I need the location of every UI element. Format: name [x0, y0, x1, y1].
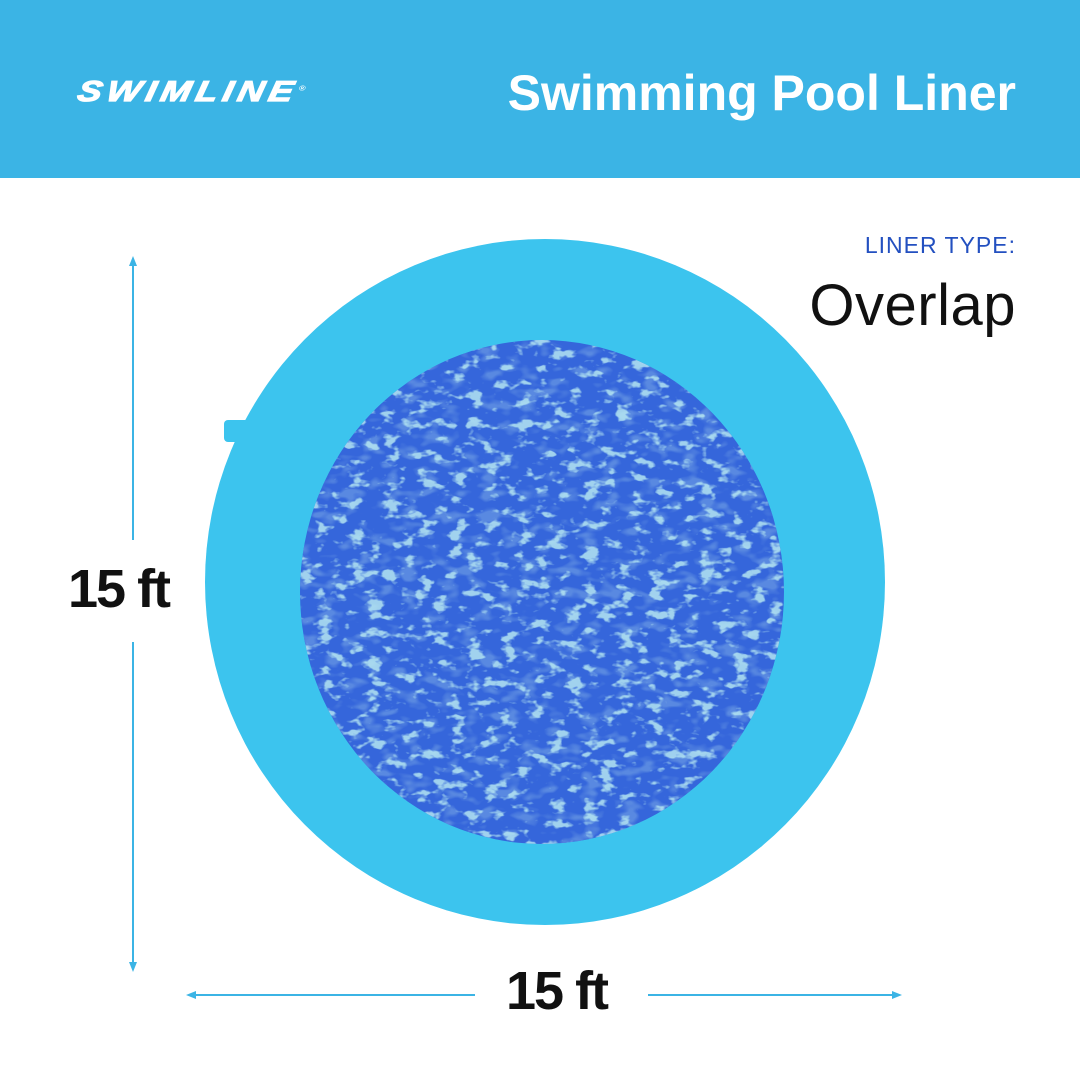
- title: Swimming Pool Liner: [508, 65, 1016, 121]
- vertical dimension arrow: [129, 256, 137, 972]
- liner type label: LINER TYPE:: [865, 232, 1016, 258]
- inner patterned floor: [290, 330, 800, 860]
- height label: 15 ft: [68, 559, 169, 619]
- outer liner ring: [205, 239, 885, 925]
- liner type value: Overlap: [809, 273, 1016, 338]
- logo: SWIMLINE®: [75, 74, 311, 107]
- pool liner illustration: [129, 239, 902, 999]
- horizontal dimension arrow: [186, 991, 902, 999]
- header bar: [0, 0, 1080, 178]
- width label: 15 ft: [506, 961, 607, 1021]
